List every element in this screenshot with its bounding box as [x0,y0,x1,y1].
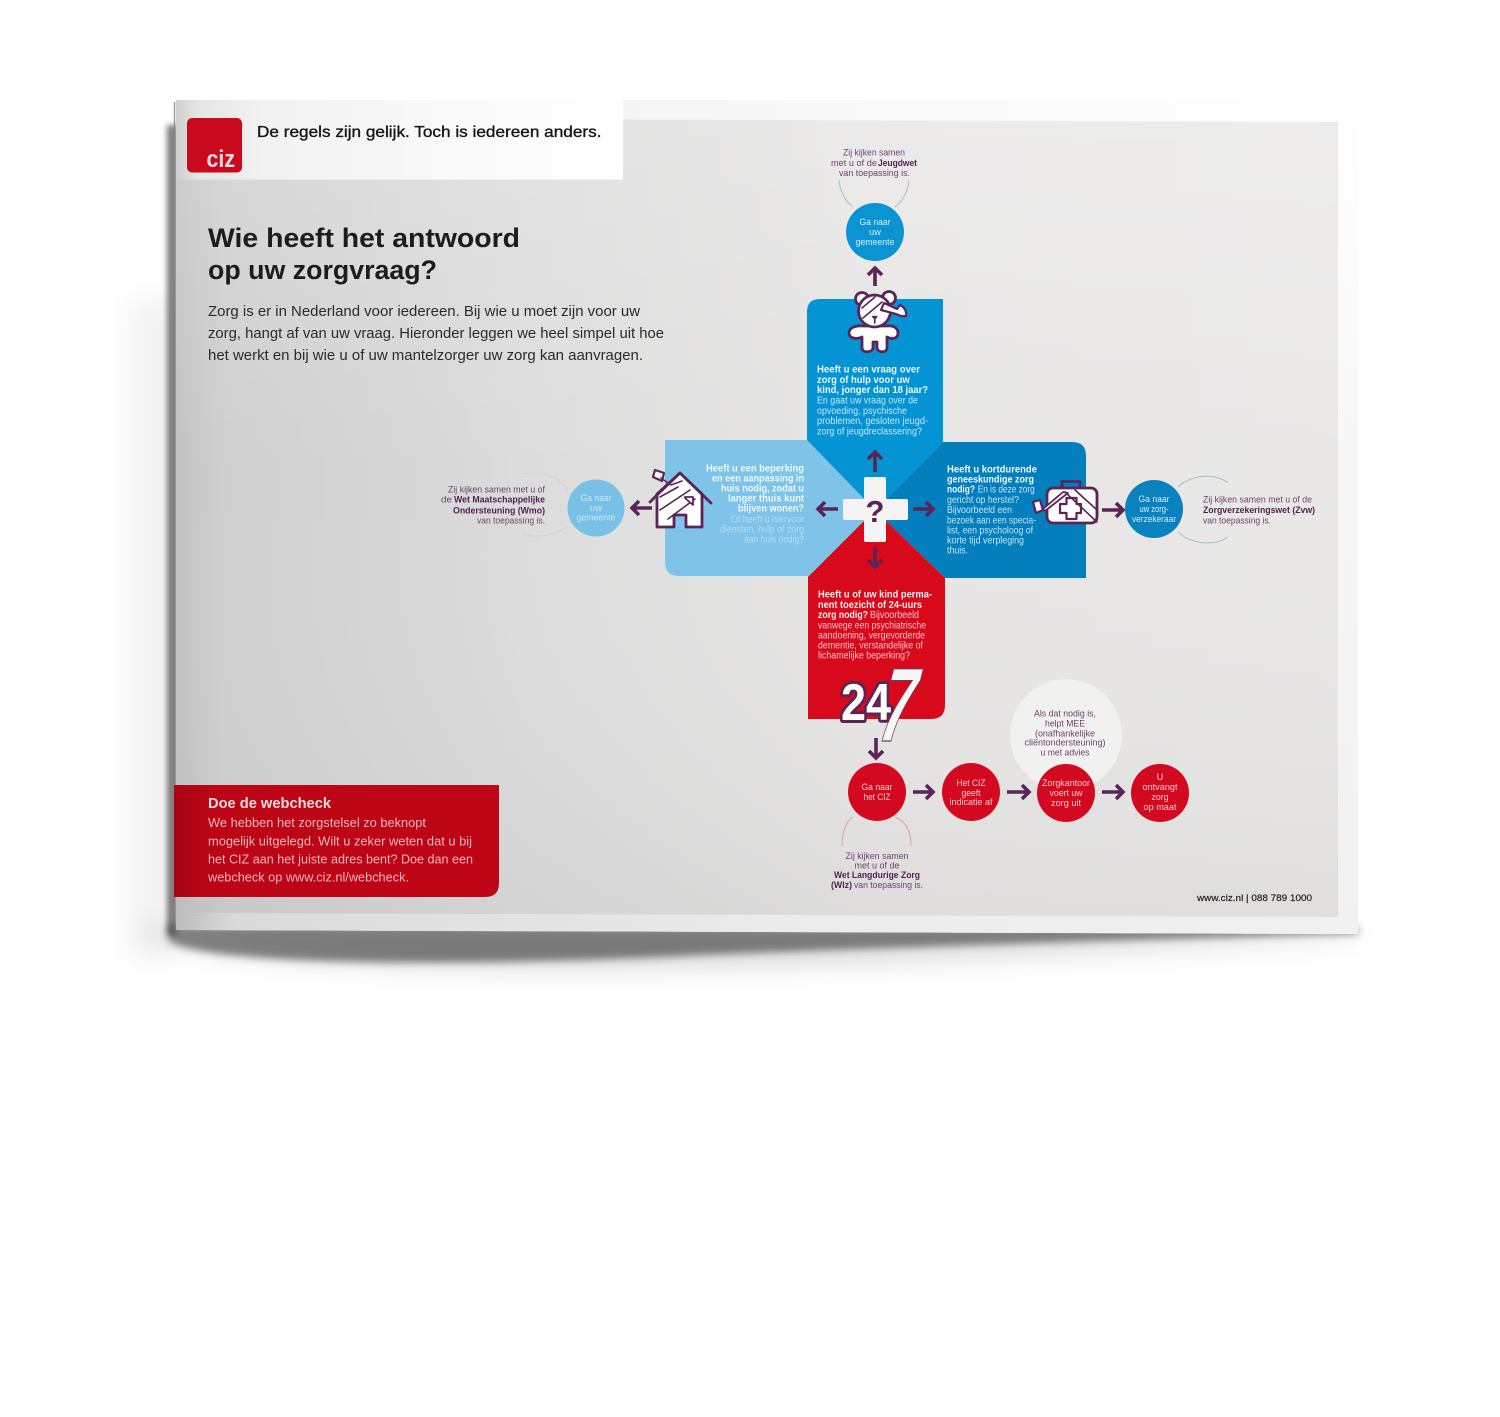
panel: cross [665,299,1086,719]
panel: webcheck callout: We hebben het zorgstelsel zo beknopt [208,815,426,830]
circle: ga naar uw zorgverzekeraar: verzekeraar [1132,514,1176,524]
panel: right dark blue [875,442,1086,578]
note: zvw: Zorgverzekeringswet (Zvw) [1203,505,1315,515]
note: wmo: Wet Maatschappelijke [454,494,545,504]
title [208,223,520,285]
note bubble: MEE: cliëntondersteuning) [1024,738,1106,748]
header band [176,100,623,180]
note: jeugdwet: Jeugdwet [878,158,917,168]
icon: first aid kit [1033,482,1097,523]
circle: zorgkantoor voert uw zorg uit: Zorgkantoor [1042,778,1090,788]
panel: bottom red [808,510,945,719]
arrows: care flow [913,785,1123,799]
circle: u ontvangt zorg op maat: ontvangt [1142,782,1178,792]
note: wlz: met u of de [854,860,900,870]
panel: right dark blue: korte tijd verpleging [947,536,1024,546]
note: zvw [1178,476,1315,543]
panel: webcheck callout: webcheck op www.ciz.nl/webcheck. [207,870,409,884]
center cross with question mark [843,477,908,542]
panel: top blue: zorg of hulp voor uw [817,375,910,386]
intro paragraph: Zorg is er in Nederland voor iedereen. Bij wie u moet zijn voor uw [208,304,641,320]
circle: ga naar uw gemeente (top): gemeente [856,237,894,247]
circle: ga naar uw zorgverzekeraar [1125,480,1183,538]
circle: ga naar uw gemeente (left): uw [590,503,602,513]
panel: bottom red: aandoening, vergevorderde [818,630,925,642]
panel: right dark blue: gericht op herstel? [947,495,1019,506]
panel: webcheck callout [174,785,499,897]
circle: ga naar uw gemeente (top): Ga naar [860,217,890,227]
panel: top blue: opvoeding, psychische [817,406,907,417]
intro paragraph: zorg, hangt af van uw vraag. Hieronder leggen we heel simpel uit hoe [208,326,664,342]
note: wlz: van toepassing is. [854,880,923,890]
panel: right dark blue: thuis. [947,546,968,556]
note: jeugdwet: van toepassing is. [839,168,910,178]
note: jeugdwet: Zij kijken samen [843,148,905,158]
panel: right dark blue: Heeft u kortdurende [947,464,1038,476]
note: wlz [831,817,923,890]
panel: top blue: zorg of jeugdreclassering? [817,426,922,438]
circle: ga naar uw gemeente (left): Ga naar [580,493,612,503]
circle: ga naar uw gemeente (left): gemeente [576,512,616,522]
note bubble: MEE: helpt MEE [1045,718,1085,728]
note: wlz: Wet Langdurige Zorg [834,870,920,880]
panel: left light blue: en een aanpassing in [712,474,804,484]
circle: ga naar het CIZ: Ga naar [862,782,892,792]
panel: left light blue: langer thuis kunt [728,494,805,504]
note bubble: MEE [1010,679,1122,791]
arrow: to jeugd circle [868,268,882,286]
brochure sheet [174,100,1358,934]
circle: het CIZ geeft indicatie af: geeft [962,788,981,798]
circle: ga naar uw zorgverzekeraar: Ga naar [1138,494,1170,504]
panel: bottom red: dementie, verstandelijke of [818,640,923,652]
panel: webcheck callout: mogelijk uitgelegd. Wilt u zeker weten dat u bij [208,834,472,848]
arrow: to zorgverzekeraar circle [1102,503,1123,517]
note: jeugdwet: met u of de [831,158,877,168]
panel: right dark blue: bezoek aan een specia- [947,516,1036,526]
circle: ga naar uw gemeente (left) [568,480,624,536]
panel: right dark blue: nodig? [947,484,975,496]
panel: top blue: problemen, gesloten jeugd- [817,416,928,427]
icon: 24/7: 24 [841,674,891,732]
panel: left light blue: diensten, hulp of zorg [720,524,804,536]
circle: u ontvangt zorg op maat: zorg [1152,792,1168,802]
note bubble: MEE: Als dat nodig is, [1034,708,1096,718]
title: op uw zorgvraag? [208,255,437,285]
note bubble: MEE: (onafhankelijke [1035,728,1095,738]
panel: left light blue: huis nodig, zodat u [721,484,804,494]
circle: ga naar uw zorgverzekeraar: uw zorg- [1140,504,1168,514]
panel: top blue: kind, jonger dan 18 jaar? [817,385,928,396]
panel: top blue [807,299,943,510]
panel: bottom red: zorg nodig? [818,610,868,621]
icon: 24/7: 7 [867,646,932,764]
panel: top blue: Heeft u een vraag over [817,364,920,376]
circle: het CIZ geeft indicatie af [942,763,1000,821]
circle: ga naar uw gemeente (top) [846,203,904,261]
note: wlz: (Wlz) [831,880,852,890]
note bubble: MEE: u met advies [1040,748,1090,758]
panel: bottom red: Heeft u of uw kind perma- [818,590,932,600]
panel: top blue: En gaat uw vraag over de [817,396,918,406]
note: wlz: Zij kijken samen [846,851,908,861]
center cross with question mark: ? [866,494,884,529]
circle: het CIZ geeft indicatie af: indicatie af [950,797,993,807]
panel: bottom red: nent toezicht of 24-uurs [818,600,923,611]
panel: webcheck callout: Doe de webcheck [208,796,332,812]
circle: u ontvangt zorg op maat: op maat [1144,802,1177,812]
panel: bottom red: Bijvoorbeeld [870,610,919,621]
circle: u ontvangt zorg op maat: U [1157,772,1163,782]
note: zvw: van toepassing is. [1203,516,1271,526]
intro paragraph [208,304,664,364]
panel: right dark blue: Bijvoorbeeld een [947,505,1012,516]
panel: left light blue: blijven wonen? [738,504,804,514]
circle: u ontvangt zorg op maat [1131,764,1189,822]
panel: right dark blue: list, een psycholoog of [947,526,1033,536]
panel: right dark blue: geneeskundige zorg [947,474,1034,486]
logo: ciz: ciz [206,146,235,173]
note: wmo: van toepassing is. [477,516,545,526]
circle: ga naar het CIZ [848,763,906,821]
note: wmo [441,473,568,536]
panel: left light blue [665,440,875,577]
title: Wie heeft het antwoord [208,223,520,253]
circle: het CIZ geeft indicatie af: Het CIZ [956,778,986,788]
panel: bottom red: vanwege een psychiatrische [818,620,926,632]
circle: zorgkantoor voert uw zorg uit [1037,764,1095,822]
tagline: De regels zijn gelijk. Toch is iedereen anders. [257,124,602,141]
circle: ga naar uw gemeente (top): uw [869,227,881,237]
footer contact: www.ciz.nl | 088 789 1000 [1196,893,1312,904]
circle: ga naar het CIZ: het CIZ [864,792,891,802]
note: wmo: Zij kijken samen met u of [448,484,545,494]
note: jeugdwet [831,148,917,207]
arrow: to CIZ circle [869,738,883,758]
brochure shadow [130,125,1358,966]
intro paragraph: het werkt en bij wie u of uw mantelzorger uw zorg kan aanvragen. [208,348,643,364]
icon: house with bandage [650,470,711,527]
panel: right dark blue: En is deze zorg [978,484,1035,496]
logo: ciz [187,118,242,173]
arrows: from cross centre [818,452,933,567]
panel: left light blue: Heeft u een beperking [706,464,804,474]
circle: zorgkantoor voert uw zorg uit: zorg uit [1051,798,1081,808]
panel: webcheck callout: het CIZ aan het juiste adres bent? Doe dan een [208,852,473,866]
note: zvw: Zij kijken samen met u of de [1203,494,1312,504]
panel: left light blue: Of heeft u hiervoor [731,514,805,526]
note: wmo: Ondersteuning (Wmo) [453,506,545,516]
panel: left light blue: aan huis nodig? [744,534,804,546]
panel: bottom red: lichamelijke beperking? [818,650,910,662]
icon: teddy bear [849,292,906,352]
arrow: to gemeente circle [632,501,652,515]
circle: zorgkantoor voert uw zorg uit: voert uw [1050,788,1083,798]
note: wmo: de [441,494,452,504]
